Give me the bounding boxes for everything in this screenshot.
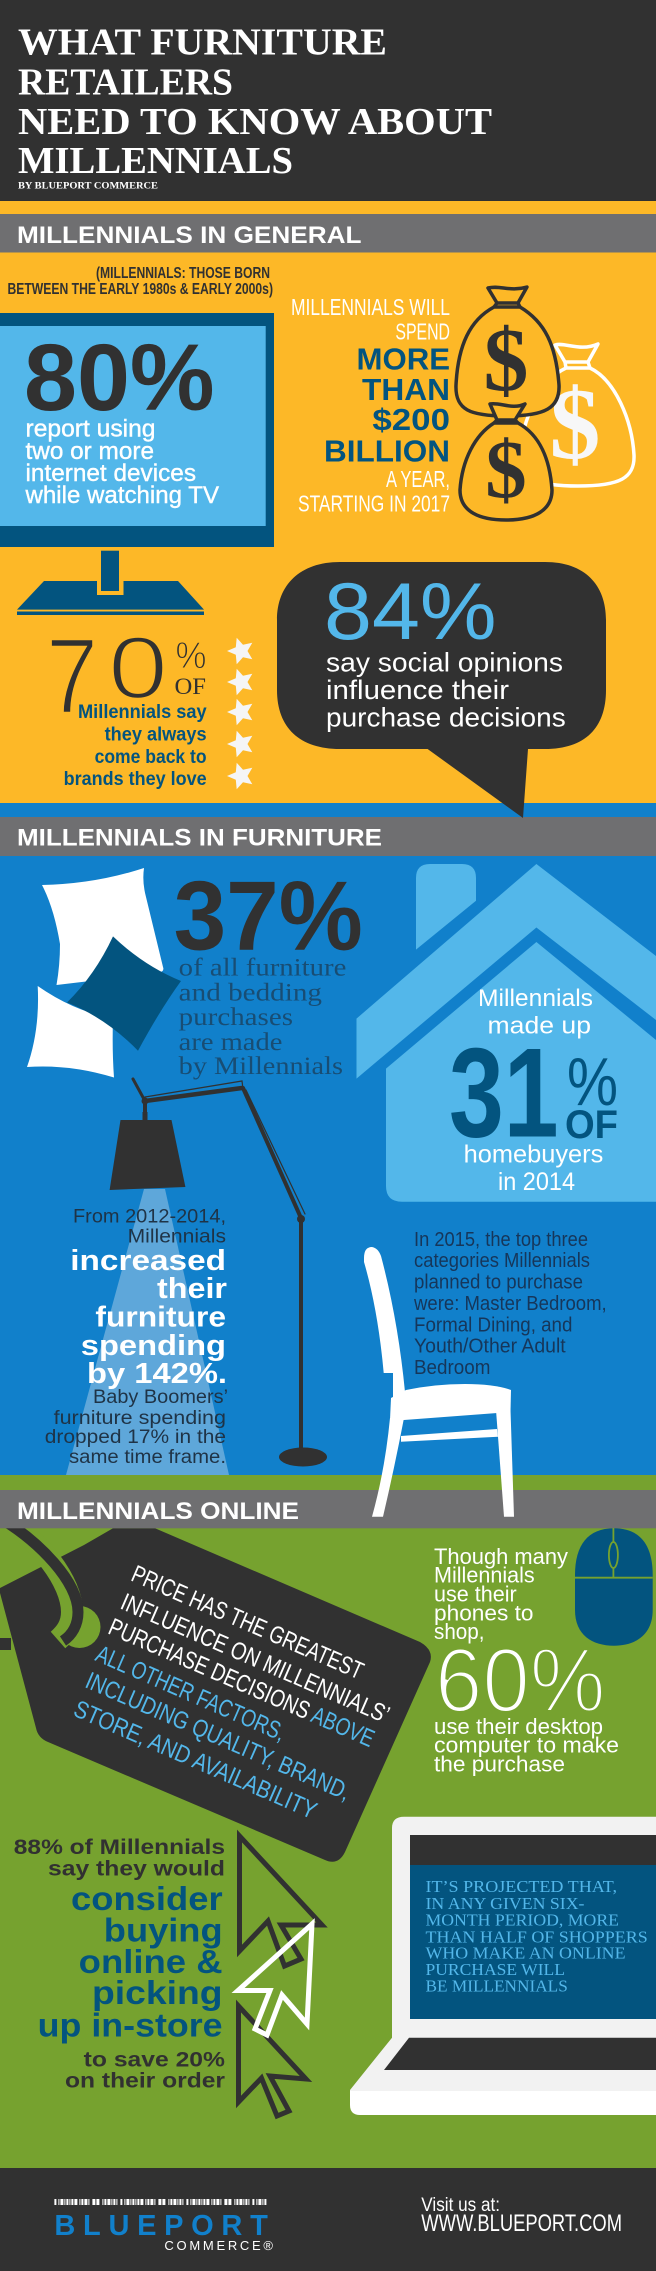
logo: blueport commerce: BLUEPORT	[54, 2210, 268, 2242]
stat: 60% use desktop	[434, 1544, 619, 1777]
text: furniture spending: furniture	[95, 1302, 226, 1334]
logo: blueport commerce	[54, 2202, 273, 2253]
stat: 60% use desktop: Millennials	[434, 1563, 535, 1588]
text: spending forecast: STARTING IN 2017	[298, 490, 450, 516]
icon: dark money bag upper	[456, 287, 559, 416]
text: buy online pick up in store: say they would	[48, 1858, 225, 1880]
stat: 37% of purchases: and bedding	[179, 980, 323, 1007]
title: WHAT FURNITURE	[18, 22, 387, 64]
text: visit us: Visit us at:	[421, 2195, 500, 2216]
text: millennials made up: Millennials	[478, 985, 593, 1012]
text: furniture spending: spending	[81, 1330, 226, 1362]
stat: 84%: 84%	[324, 567, 497, 657]
text: report using devices: while watching TV	[25, 482, 220, 509]
text: projected shoppers: MONTH PERIOD, MORE	[426, 1911, 619, 1930]
text: price influence	[70, 1561, 393, 1825]
heading band: millennials online	[0, 1490, 656, 1528]
icon: white chair	[364, 1247, 514, 1517]
text: price influence: STORE, AND AVAILABILITY	[70, 1696, 321, 1825]
icon: computer mouse	[575, 1528, 653, 1646]
text: homebuyers in 2014: in 2014	[498, 1168, 575, 1196]
stat: 60% use desktop: Though many	[434, 1544, 568, 1569]
stat: 60% use desktop: use their desktop	[434, 1714, 603, 1739]
logo: blueport commerce: COMMERCE®	[164, 2238, 273, 2253]
text: furniture spending: same time frame.	[69, 1447, 226, 1468]
stat: 60% use desktop: shop,	[434, 1619, 484, 1644]
stat: 31% of: %	[567, 1044, 618, 1120]
text: top three categories: In 2015, the top three	[414, 1229, 588, 1251]
text: top three categories: planned to purchase	[414, 1272, 583, 1294]
stat: 80%: 80%	[24, 325, 215, 431]
text: projected shoppers	[426, 1877, 648, 1996]
stat: 37% of purchases: by Millennials	[179, 1053, 343, 1080]
text: furniture spending: increased	[70, 1245, 226, 1277]
stat: 60% use desktop: use their	[434, 1582, 517, 1607]
text: spending forecast: MILLENNIALS WILL	[291, 294, 450, 320]
text: projected shoppers: IN ANY GIVEN SIX-	[426, 1894, 585, 1913]
text: price influence: INCLUDING QUALITY, BRAND,	[81, 1667, 354, 1806]
icon: television with 80% stat	[0, 313, 274, 547]
definition note: BETWEEN THE EARLY 1980s & EARLY 2000s)	[8, 281, 273, 298]
text: buy online pick up in store: on their order	[65, 2070, 225, 2093]
text: furniture spending: From 2012-2014,	[73, 1207, 226, 1228]
text: furniture spending: by 142%.	[87, 1358, 227, 1390]
text: top three categories: Formal Dining, and	[414, 1315, 572, 1337]
icon: pillows	[27, 868, 181, 1078]
stat: 37% of purchases: are made	[179, 1029, 282, 1056]
stat: 70% of millennials: they always	[105, 725, 207, 746]
panel: millennials online background	[0, 1475, 656, 2168]
text: spending forecast: A YEAR,	[386, 466, 450, 492]
icon: floor lamp	[66, 1079, 327, 1475]
definition note	[8, 265, 273, 298]
text: report using devices: two or more	[26, 438, 154, 465]
text: price influence: PRICE HAS THE GREATEST	[127, 1561, 367, 1685]
icon: white cursor	[238, 1924, 312, 2035]
text: projected shoppers: IT’S PROJECTED THAT,	[426, 1877, 617, 1896]
text: buy online pick up in store: online &	[79, 1943, 223, 1980]
speech bubble: 84% stat	[277, 562, 606, 818]
stat: 70% of millennials: brands they love	[64, 769, 207, 790]
icon: dark cursor lower	[238, 2006, 306, 2116]
text: price influence: ALL OTHER FACTORS,	[92, 1641, 289, 1747]
text: buy online pick up in store	[14, 1836, 225, 2093]
icon: dark money bag lower: $	[485, 423, 527, 515]
text: price influence: INFLUENCE ON MILLENNIALS’	[117, 1589, 393, 1729]
text: homebuyers in 2014	[464, 1141, 603, 1196]
text: top three categories: categories Millennials	[414, 1250, 590, 1272]
text: furniture spending: their	[157, 1273, 227, 1305]
text: report using devices: report using	[26, 415, 156, 442]
text: social opinions: say social opinions	[326, 647, 563, 677]
text: projected shoppers: BE MILLENNIALS	[426, 1977, 568, 1996]
text: price influence: PURCHASE DECISIONS ABOVE	[104, 1614, 378, 1753]
stat: 37% of purchases: 37%	[174, 861, 363, 971]
title: MILLENNIALS	[18, 140, 293, 182]
panel: millennials in furniture background	[0, 803, 656, 1475]
text: buy online pick up in store: up in-store	[38, 2007, 223, 2044]
text: spending forecast: BILLION	[324, 433, 450, 468]
heading band: millennials online: MILLENNIALS ONLINE	[17, 1498, 299, 1525]
text: spending forecast	[291, 294, 450, 516]
stat: 60% use desktop: the purchase	[434, 1752, 565, 1777]
panel: footer	[0, 2168, 656, 2271]
definition note: (MILLENNIALS: THOSE BORN	[96, 265, 270, 282]
stat: 60% use desktop: 60%	[435, 1631, 605, 1732]
text: furniture spending: Millennials	[128, 1227, 226, 1248]
text: buy online pick up in store: to save 20%	[84, 2049, 225, 2072]
stat: 37% of purchases: of all furniture	[179, 955, 346, 982]
stat: 70% of millennials: Millennials say	[78, 702, 207, 723]
text: furniture spending: Baby Boomers’	[93, 1387, 228, 1408]
stat: 60% use desktop: computer to make	[434, 1733, 619, 1758]
text: furniture spending	[45, 1207, 228, 1468]
text: spending forecast: MORE	[356, 342, 450, 377]
text: spending forecast: THAN	[362, 372, 450, 407]
icon: laptop	[350, 1817, 656, 2115]
text: social opinions: purchase decisions	[326, 702, 566, 732]
heading band: millennials in general	[0, 214, 656, 252]
stat: 70% of millennials: 0	[108, 618, 168, 717]
icon: dark cursor upper	[240, 1836, 322, 1966]
text: furniture spending: dropped 17% in the	[45, 1427, 226, 1448]
icon: dark money bag upper: $	[484, 311, 528, 410]
icon: dark money bag lower	[460, 404, 552, 520]
panel: millennials in general background	[0, 201, 656, 803]
text: homebuyers in 2014: homebuyers	[464, 1141, 603, 1169]
heading band: millennials in furniture	[0, 817, 656, 856]
text: millennials made up: made up	[488, 1013, 591, 1040]
text: top three categories: were: Master Bedroom,	[413, 1293, 607, 1315]
text: buy online pick up in store: picking	[92, 1974, 223, 2011]
text: buy online pick up in store: buying	[104, 1912, 223, 1949]
text: millennials made up	[478, 985, 593, 1040]
text: buy online pick up in store: 88% of Millennials	[14, 1836, 225, 1859]
icon: five stars	[227, 638, 252, 789]
text: report using devices	[25, 415, 220, 509]
stat: 31% of: OF	[565, 1103, 618, 1147]
stat: 31% of: 31	[449, 1022, 559, 1164]
text: social opinions: influence their	[326, 675, 509, 705]
icon: television stand	[17, 551, 204, 615]
icon: price tag	[0, 1516, 431, 1862]
icon: white money bag: $	[550, 368, 600, 481]
text: top three categories	[413, 1229, 607, 1379]
stat: 70% of millennials: OF	[174, 674, 206, 699]
stat: 60% use desktop: phones to	[434, 1601, 534, 1626]
text: projected shoppers: WHO MAKE AN ONLINE	[426, 1943, 626, 1962]
heading band: millennials in general: MILLENNIALS IN GENERAL	[17, 222, 361, 249]
title	[18, 22, 492, 182]
text: projected shoppers: PURCHASE WILL	[426, 1960, 565, 1979]
text: report using devices: internet devices	[26, 460, 196, 487]
title: RETAILERS	[18, 61, 233, 103]
text: spending forecast: SPEND	[395, 318, 450, 344]
stat: 70% of millennials: %	[176, 635, 206, 677]
icon: white money bag	[520, 344, 634, 486]
stat: 70% of millennials: come back to	[95, 747, 207, 768]
text: top three categories: Bedroom	[414, 1357, 490, 1379]
text: social opinions	[326, 647, 566, 732]
text: furniture spending: furniture spending	[54, 1408, 226, 1429]
stat: 37% of purchases	[174, 861, 363, 1080]
text: buy online pick up in store: consider	[71, 1880, 223, 1917]
title: NEED TO KNOW ABOUT	[18, 101, 492, 143]
text: projected shoppers: THAN HALF OF SHOPPERS	[426, 1927, 648, 1946]
icon: house with 31% stat	[356, 864, 656, 1202]
byline: BY BLUEPORT COMMERCE	[18, 182, 158, 192]
stat: 70% of millennials: 7	[46, 615, 98, 736]
text: spending forecast: $200	[372, 402, 450, 437]
stat: 70% of millennials	[46, 615, 207, 790]
stat: 37% of purchases: purchases	[179, 1004, 293, 1031]
text: visit us	[421, 2195, 622, 2237]
text: top three categories: Youth/Other Adult	[414, 1336, 566, 1358]
heading band: millennials in furniture: MILLENNIALS IN FURNITURE	[17, 824, 382, 851]
